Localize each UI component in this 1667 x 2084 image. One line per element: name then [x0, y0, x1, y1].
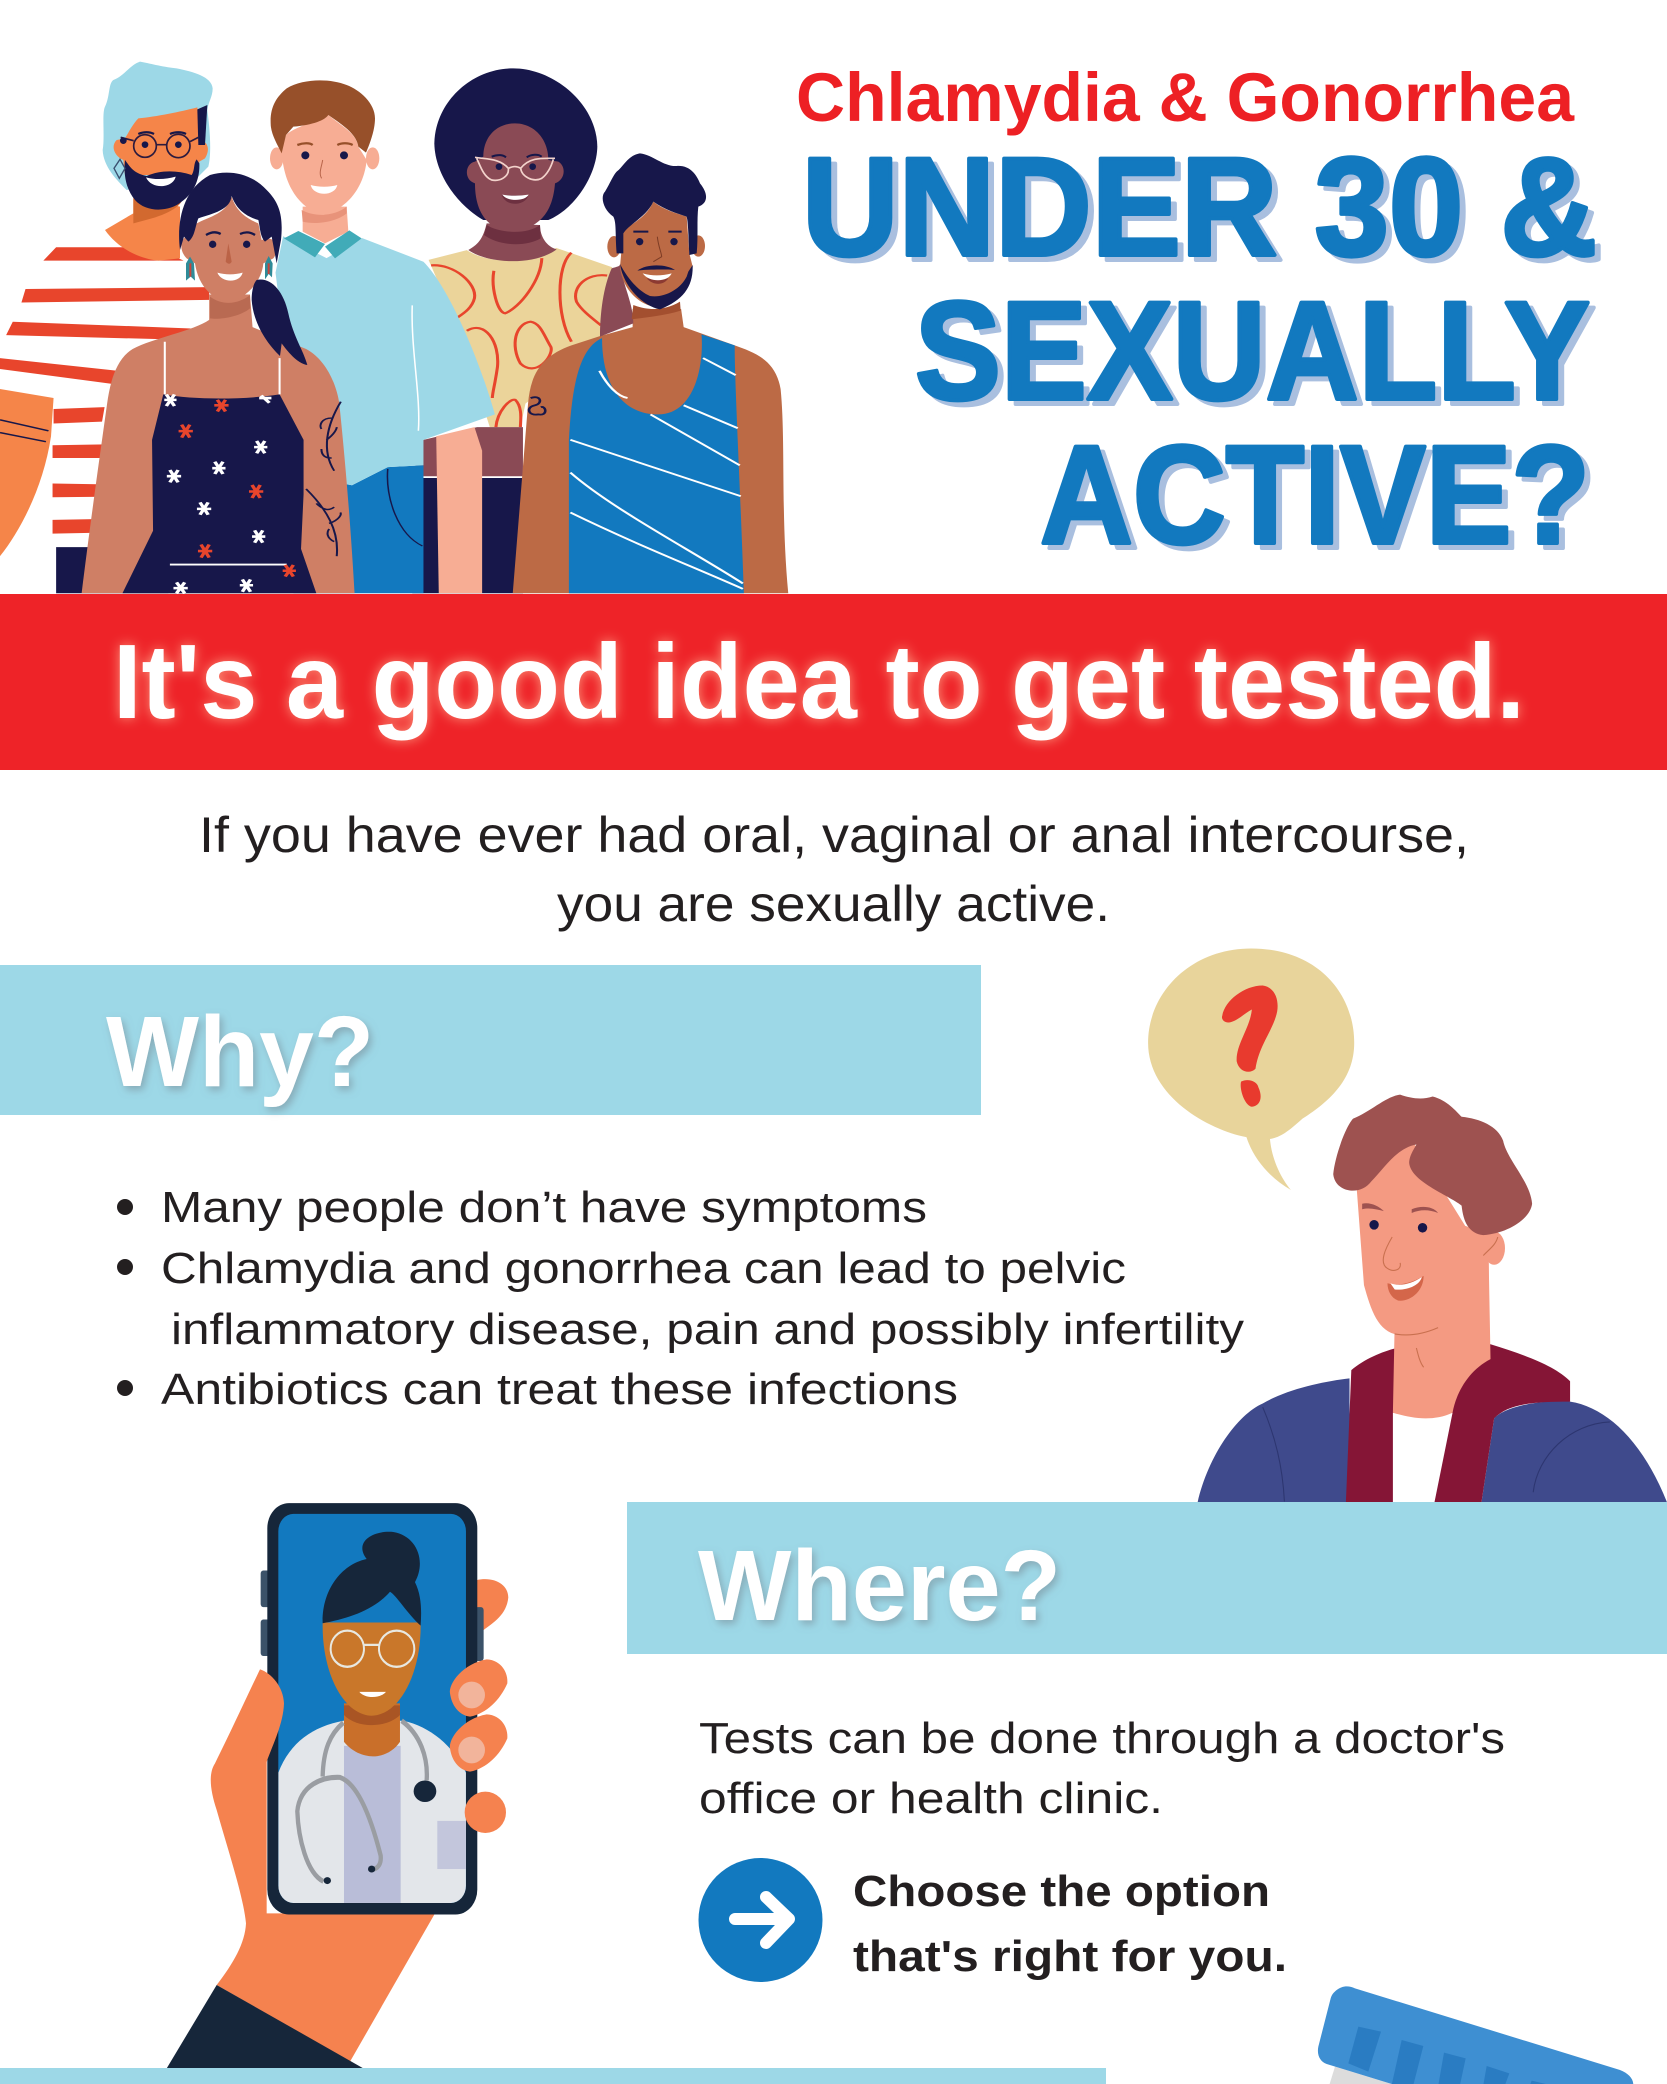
where text — [699, 1714, 1505, 1823]
red banner — [0, 594, 1667, 770]
headline: UNDER 30 & SEXUALLY ACTIVE? — [802, 128, 1603, 578]
illustration: test tube cap (cropped) — [1318, 1986, 1633, 2084]
next section bar (cropped) — [0, 2068, 1106, 2084]
headline: UNDER 30 & SEXUALLY ACTIVE?: SEXUALLY — [915, 272, 1590, 429]
callout: choose the option: that's right for you. — [853, 1932, 1287, 1981]
section heading: Why?: Why? — [106, 996, 374, 1108]
intro text — [199, 807, 1469, 932]
intro text: you are sexually active. — [557, 876, 1110, 932]
where text: office or health clinic. — [699, 1774, 1163, 1823]
subtitle: Chlamydia & Gonorrhea: Chlamydia & Gonorrhea — [796, 59, 1575, 136]
headline: UNDER 30 & SEXUALLY ACTIVE?: UNDER 30 & — [808, 133, 1603, 290]
why bullet list — [117, 1183, 1244, 1414]
doctor on screen — [278, 1532, 466, 1903]
hand and sleeve — [167, 1669, 435, 2068]
section heading: Why? — [0, 965, 981, 1115]
callout: choose the option — [853, 1867, 1287, 1981]
speech bubble with question mark — [1148, 948, 1354, 1190]
title block — [796, 59, 1603, 578]
person: man in blue tank top — [513, 153, 788, 593]
person: woman with dark hair and floral dress — [82, 173, 355, 593]
intro text: If you have ever had oral, vaginal or anal intercourse, — [199, 807, 1469, 863]
why bullet list: inflammatory disease, pain and possibly infertility — [171, 1305, 1244, 1354]
where text: Tests can be done through a doctor's — [699, 1714, 1505, 1763]
person: man in light blue shirt — [270, 80, 495, 593]
icon: arrow in blue circle — [698, 1858, 822, 1982]
why bullet list: Chlamydia and gonorrhea can lead to pelvic — [161, 1244, 1126, 1293]
headline: UNDER 30 & SEXUALLY ACTIVE?: ACTIVE? — [1040, 416, 1590, 573]
why bullet list: Antibiotics can treat these infections — [161, 1365, 958, 1414]
man figure — [1198, 1095, 1667, 1502]
callout: choose the option: Choose the option — [853, 1867, 1270, 1916]
person: woman with afro and glasses — [412, 68, 612, 593]
section heading: Where?: Where? — [698, 1530, 1061, 1642]
thumb and fingers — [257, 1659, 507, 1833]
illustration: group of five young people — [0, 62, 788, 593]
person: man with blue hair and striped shirt — [0, 62, 214, 593]
headline: UNDER 30 & SEXUALLY ACTIVE?: ACTIVE? — [1046, 421, 1596, 578]
banner text: It's a good idea to get tested. — [113, 623, 1525, 741]
phone — [261, 1503, 508, 1915]
section heading: Where? — [627, 1502, 1667, 1654]
illustration: hand holding phone with doctor — [167, 1503, 508, 2068]
why bullet list: Many people don’t have symptoms — [161, 1183, 927, 1232]
headline: UNDER 30 & SEXUALLY ACTIVE?: UNDER 30 & — [802, 128, 1597, 285]
illustration: man with question speech bubble — [1148, 948, 1667, 1502]
headline: UNDER 30 & SEXUALLY ACTIVE?: SEXUALLY — [921, 277, 1596, 434]
